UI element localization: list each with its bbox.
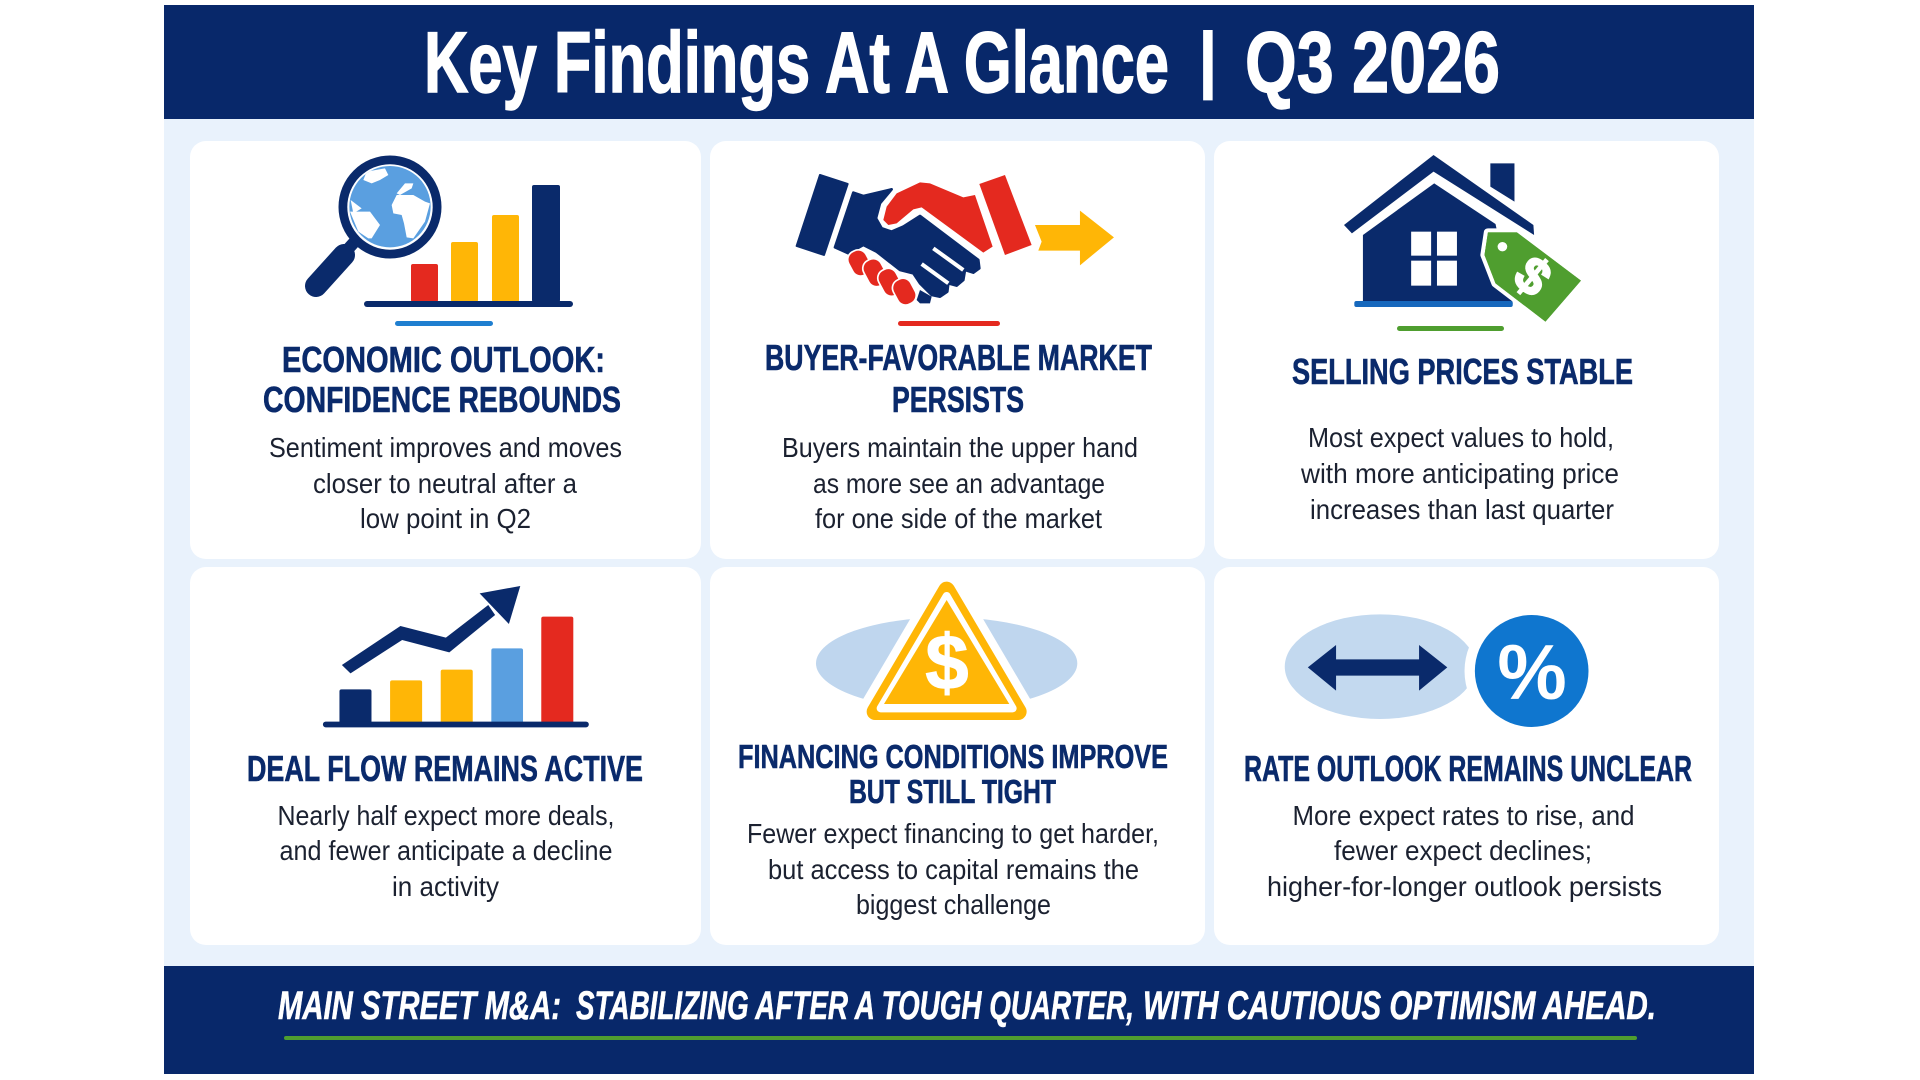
body text xyxy=(1267,800,1662,902)
body text: More expect rates to rise, and xyxy=(1292,800,1634,831)
body text: with more anticipating price xyxy=(1300,458,1619,489)
icon: warning triangle with dollar sign xyxy=(816,590,1077,712)
body text: higher-for-longer outlook persists xyxy=(1267,871,1662,902)
accent underline xyxy=(898,321,1000,326)
footer takeaway text: WITH CAUTIOUS OPTIMISM AHEAD. xyxy=(1143,984,1656,1028)
heading: FINANCING CONDITIONS IMPROVE xyxy=(738,738,1168,775)
title: | xyxy=(1198,17,1218,101)
title: Q3 2026 xyxy=(1245,15,1500,111)
body text xyxy=(269,432,622,534)
title: Key Findings At A Glance xyxy=(424,15,1169,111)
body text xyxy=(278,800,614,902)
panel: buyer-favorable market xyxy=(710,141,1205,559)
body text: but access to capital remains the xyxy=(768,854,1139,885)
heading: ECONOMIC OUTLOOK: xyxy=(282,339,605,380)
heading xyxy=(263,339,621,420)
body text: as more see an advantage xyxy=(813,468,1105,499)
icon: double arrow and percent badge: % xyxy=(1497,628,1567,716)
icon: double arrow and percent badge xyxy=(1285,605,1599,737)
title banner xyxy=(164,5,1754,119)
body text: low point in Q2 xyxy=(360,503,531,534)
footer takeaway text xyxy=(278,984,1656,1028)
footer takeaway text: MAIN STREET M&A: xyxy=(278,984,561,1028)
icon: house with price tag: $ xyxy=(1503,245,1562,308)
heading: BUYER-FAVORABLE MARKET xyxy=(765,337,1152,378)
body text: in activity xyxy=(392,871,499,902)
accent underline xyxy=(395,321,493,326)
body text: biggest challenge xyxy=(856,889,1051,920)
body text: and fewer anticipate a decline xyxy=(280,835,612,866)
body text: for one side of the market xyxy=(815,503,1102,534)
panel: financing conditions xyxy=(710,567,1205,945)
heading: SELLING PRICES STABLE xyxy=(1292,351,1633,392)
body text: Fewer expect financing to get harder, xyxy=(747,818,1159,849)
heading: CONFIDENCE REBOUNDS xyxy=(263,379,621,420)
footer takeaway text: STABILIZING AFTER A TOUGH QUARTER, xyxy=(576,984,1134,1028)
body text xyxy=(747,818,1159,920)
panel: deal flow xyxy=(190,567,701,945)
icon: rising bar chart with trend arrow xyxy=(323,586,589,727)
body text: Nearly half expect more deals, xyxy=(278,800,614,831)
icon: magnifier over globe and bar chart xyxy=(316,156,573,307)
accent underline xyxy=(1397,326,1504,331)
body text: fewer expect declines; xyxy=(1334,835,1592,866)
body text: increases than last quarter xyxy=(1310,494,1614,525)
background panel xyxy=(164,119,1754,969)
body text: Buyers maintain the upper hand xyxy=(782,432,1138,463)
icon: warning triangle with dollar sign: $ xyxy=(925,618,969,706)
heading: BUT STILL TIGHT xyxy=(849,773,1056,810)
heading: RATE OUTLOOK REMAINS UNCLEAR xyxy=(1244,748,1692,789)
icon: handshake with arrow xyxy=(797,175,1114,307)
body text: Most expect values to hold, xyxy=(1308,422,1614,453)
panel: rate outlook xyxy=(1214,567,1719,945)
heading: DEAL FLOW REMAINS ACTIVE xyxy=(247,748,643,789)
footer green rule xyxy=(284,1036,1637,1040)
body text: Sentiment improves and moves xyxy=(269,432,622,463)
heading xyxy=(765,337,1152,420)
footer banner xyxy=(164,966,1754,1074)
panel: economic outlook xyxy=(190,141,701,559)
heading xyxy=(738,738,1168,810)
body text xyxy=(1300,422,1619,525)
body text xyxy=(782,432,1138,534)
body text: closer to neutral after a xyxy=(313,468,578,499)
heading: PERSISTS xyxy=(892,379,1024,420)
icon: house with price tag xyxy=(1344,155,1581,322)
panel: selling prices stable xyxy=(1214,141,1719,559)
